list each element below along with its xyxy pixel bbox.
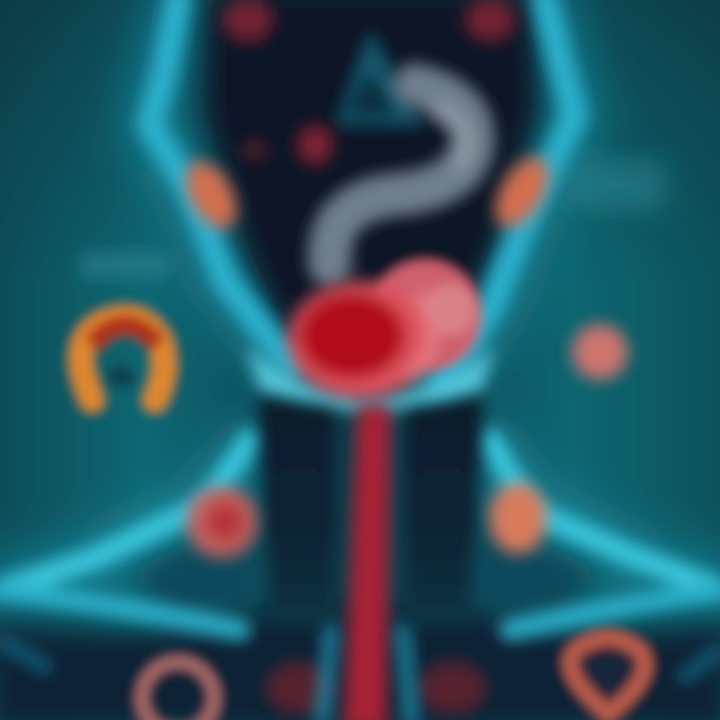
red vertical vessel [344, 405, 390, 720]
central cyan glow under stomach [245, 345, 495, 411]
cyan outline: left body [0, 0, 290, 630]
red circle lower left [187, 487, 257, 557]
orange gland left [176, 154, 246, 236]
faint label left [80, 252, 170, 278]
bottom ring left [142, 662, 214, 720]
bottom ring right [570, 638, 646, 715]
bottom dark band [0, 520, 720, 720]
upper red spots [223, 0, 515, 165]
teal triangle in chest [335, 30, 425, 125]
gray intestine coil [330, 85, 473, 265]
bottom dark red organs [266, 662, 486, 714]
stomach: red lobe [288, 282, 432, 398]
cyan outline: right body [440, 0, 720, 630]
dark torso silhouette [204, 0, 538, 350]
orange circle lower right [490, 483, 546, 553]
dark abdomen columns [258, 395, 484, 625]
orange gland right [486, 149, 558, 235]
stomach: pink lobe [369, 259, 481, 371]
faint label right [570, 160, 665, 210]
scattered bottom-left cyan marks [0, 640, 720, 680]
cyan vessels near bottom centre [322, 625, 412, 720]
orange horseshoe icon [81, 318, 164, 400]
pink circle icon [573, 325, 627, 379]
